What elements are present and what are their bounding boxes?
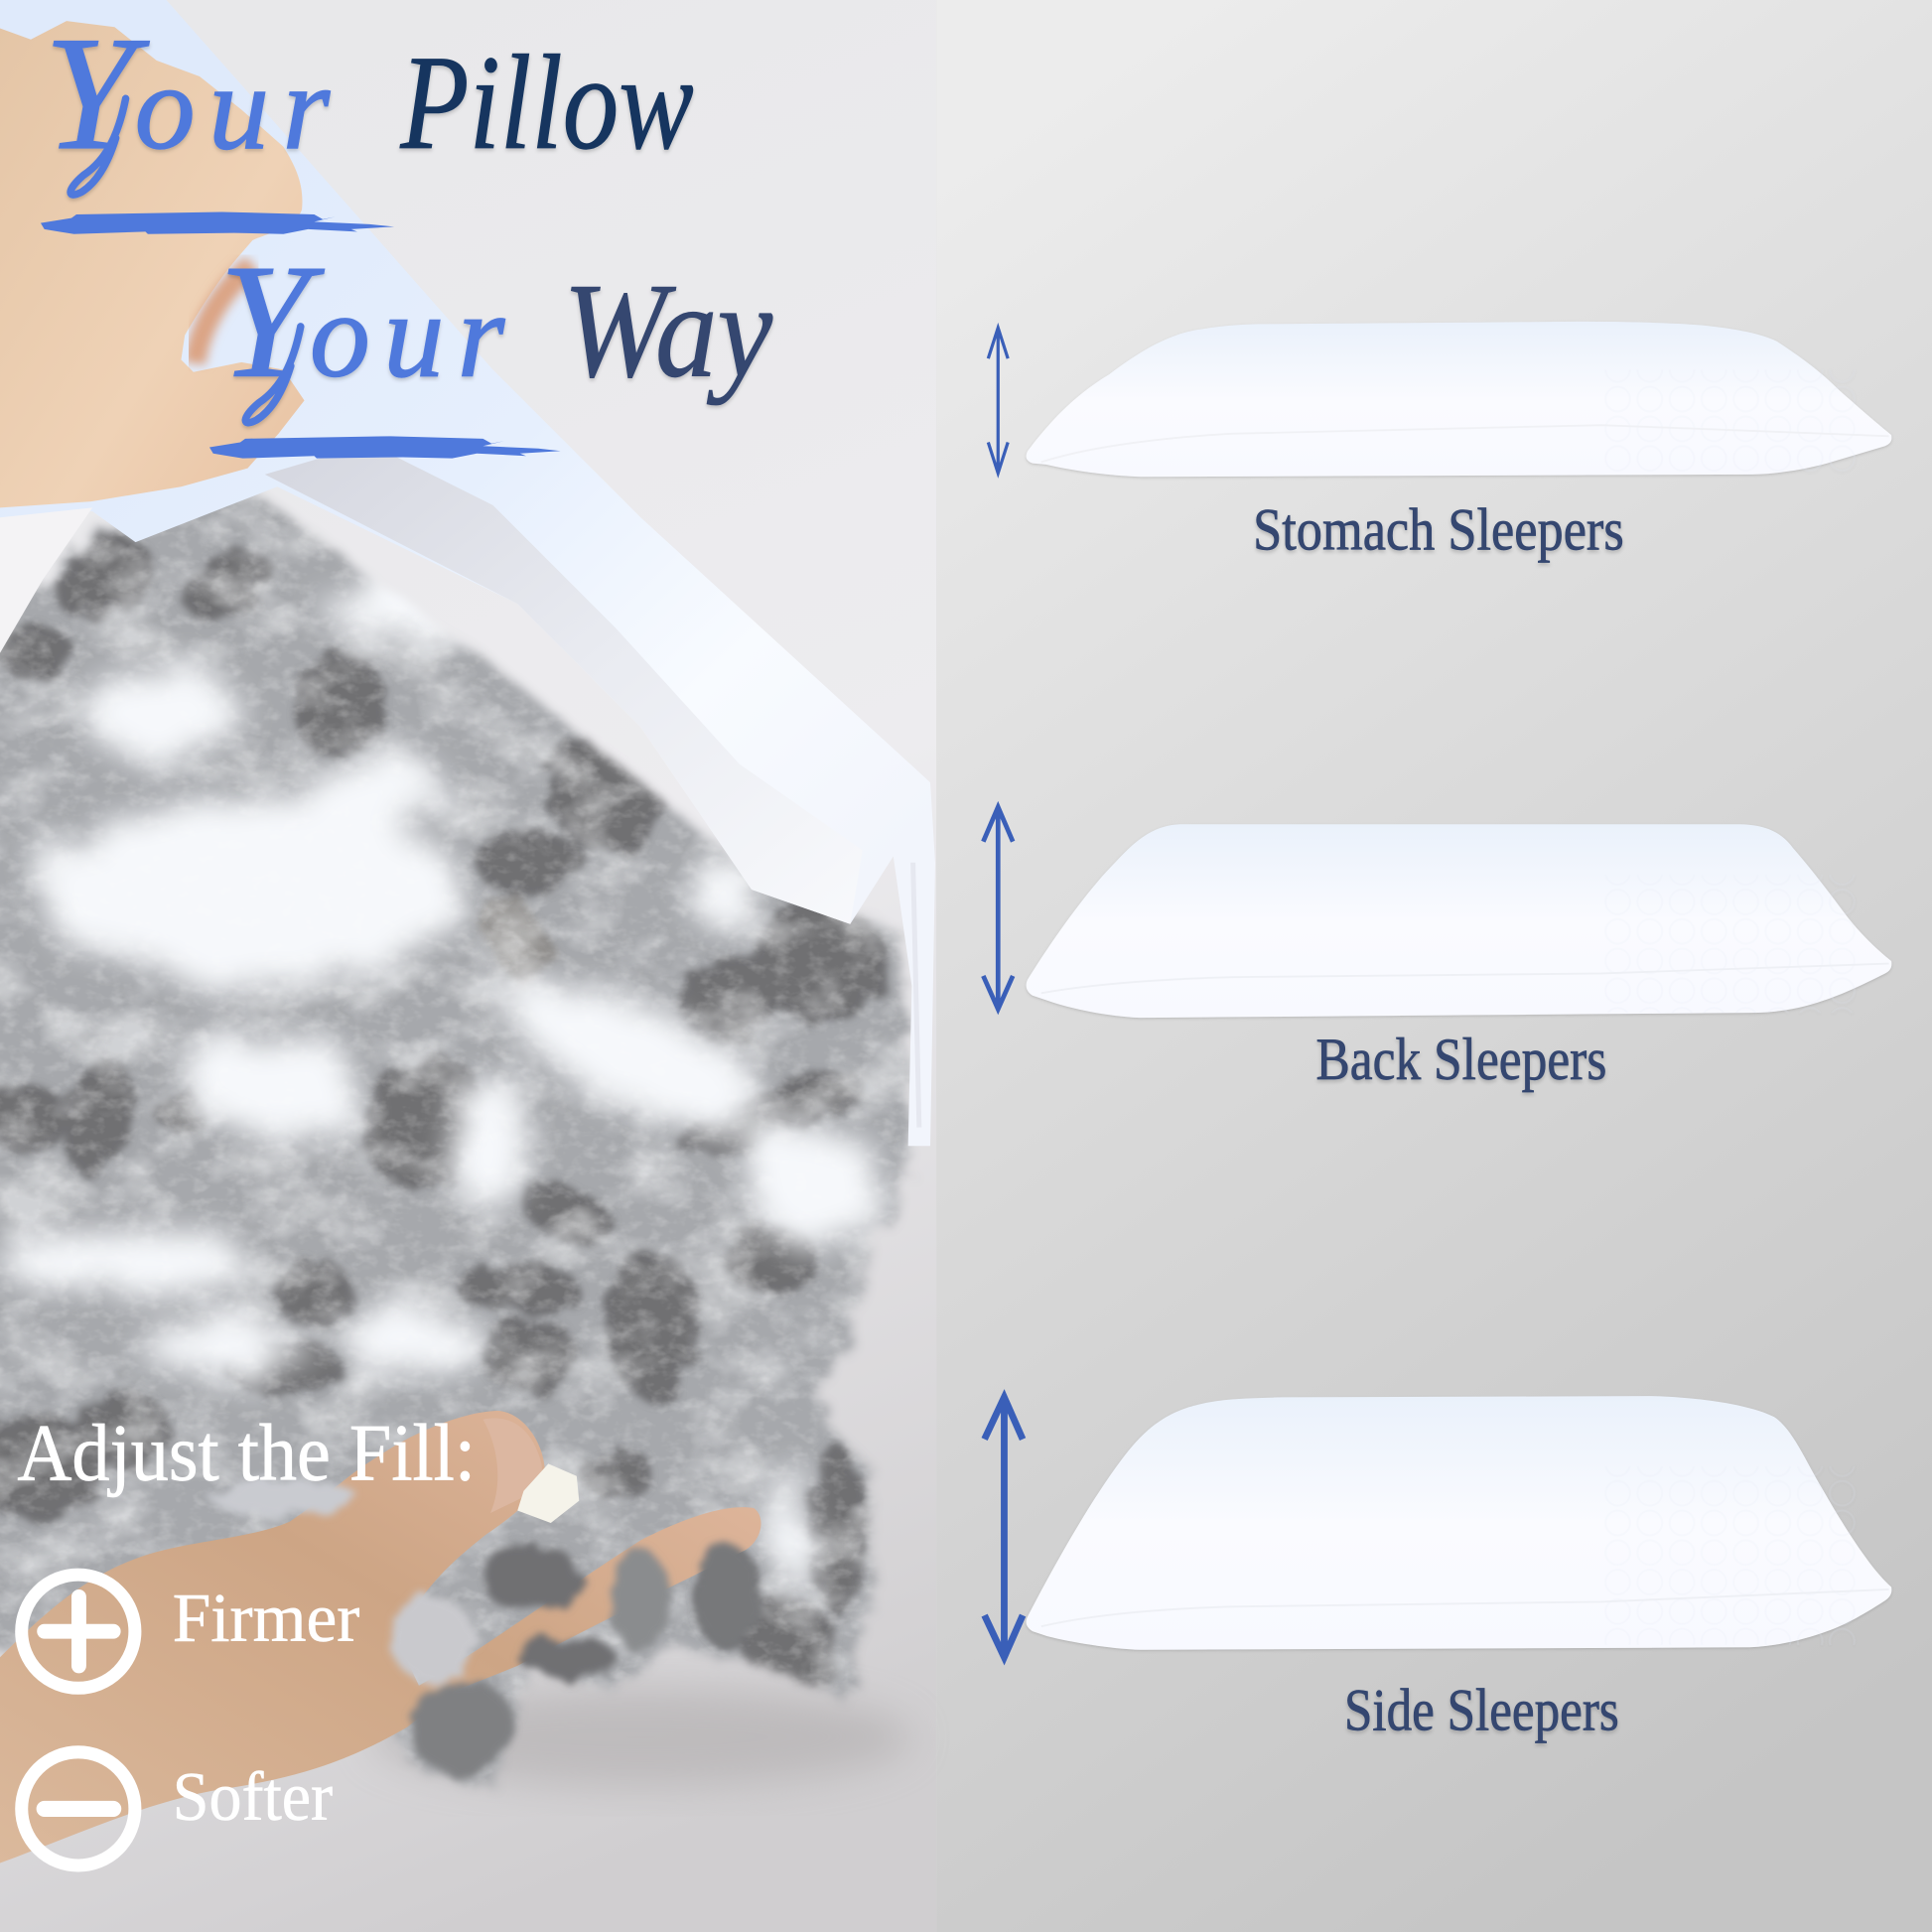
grey foam pieces: [0, 521, 888, 1713]
pillow: side: [1027, 1396, 1891, 1650]
translucent inner flap: [265, 444, 863, 924]
line 2: Your: Your: [219, 232, 518, 412]
title: [45, 4, 773, 423]
icon: minus: [22, 1752, 135, 1865]
white fluff: [0, 567, 881, 1584]
line 2: Way: Way: [563, 255, 773, 406]
brush underline 1: [41, 211, 394, 234]
pillow: stomach: [1027, 322, 1891, 477]
label: stomach sleepers: Stomach Sleepers: [1253, 497, 1624, 564]
finger shadow: [195, 265, 252, 363]
photo: pillow fill and hands: [0, 0, 949, 1863]
label: side sleepers: Side Sleepers: [1344, 1677, 1619, 1743]
pillow: back: [1027, 824, 1891, 1018]
front foam pieces over hand: [209, 1480, 761, 1774]
thumb nail: [483, 1418, 542, 1513]
heading: adjust the fill: Adjust the Fill:: [17, 1408, 476, 1498]
panel: right background: [936, 0, 1932, 1932]
arrow: side height: [985, 1397, 1023, 1657]
fabric bag flap: [0, 0, 935, 1146]
fill base: [0, 469, 949, 1824]
zipper: [913, 863, 919, 1128]
shadow beneath fill: [369, 1688, 911, 1787]
arrow: stomach height: [988, 328, 1008, 474]
panel: photo background: [0, 0, 936, 1932]
fill mass: [0, 469, 949, 1824]
top hand: [0, 21, 305, 507]
arrow: back height: [983, 807, 1013, 1009]
label: softer: Softer: [173, 1759, 333, 1836]
brush underline 2: [209, 436, 561, 459]
bottom hand: [0, 1411, 760, 1863]
Y swash 2: [245, 327, 301, 423]
foam piece held by thumb: [517, 1463, 579, 1523]
line 1: Pillow: Pillow: [400, 27, 694, 178]
icon: plus: [22, 1575, 135, 1688]
fabric scrap left: [0, 507, 92, 653]
cloud haze over fill: [0, 469, 936, 1799]
fibre texture: [0, 469, 936, 1799]
label: back sleepers: Back Sleepers: [1315, 1027, 1606, 1093]
line 1: Your: Your: [45, 4, 344, 184]
label: firmer: Firmer: [173, 1581, 359, 1657]
Y swash 1: [70, 98, 126, 195]
